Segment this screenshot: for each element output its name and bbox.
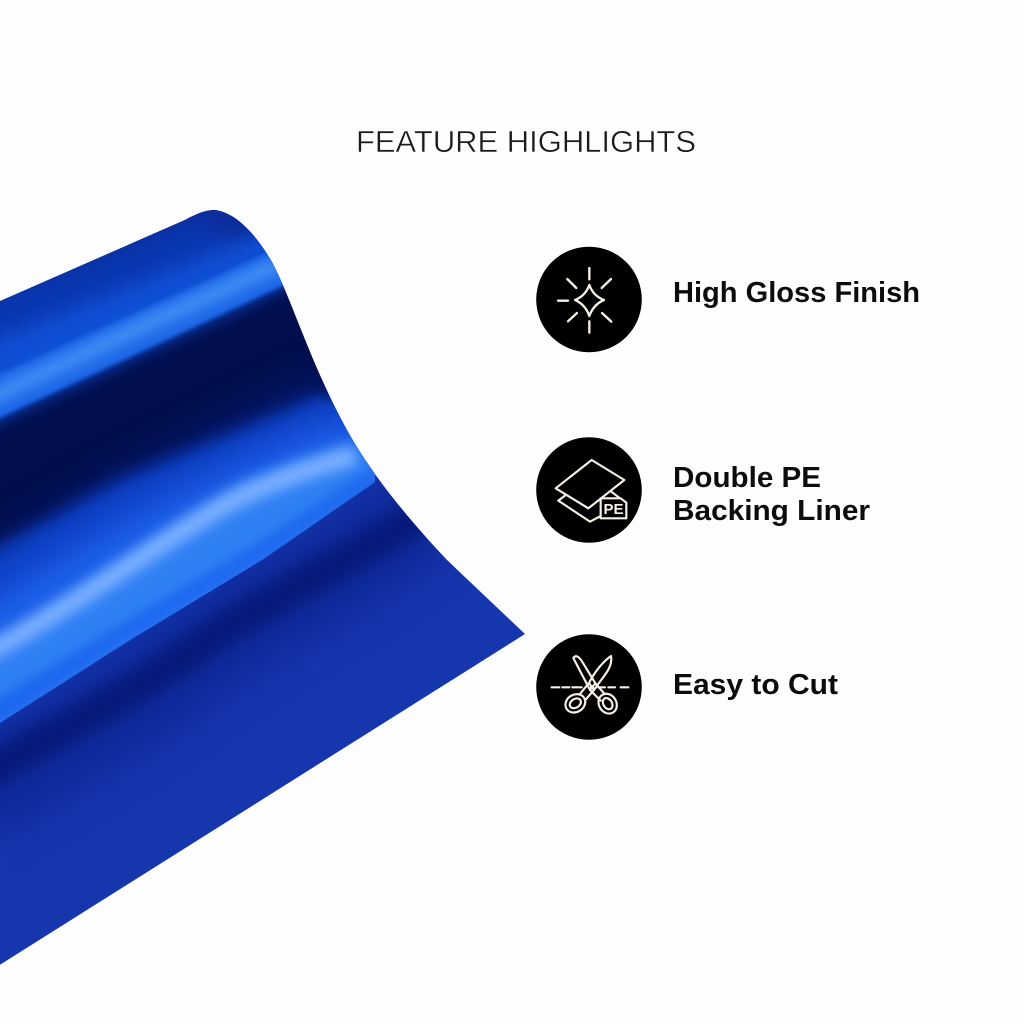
icon: layered sheets with PE tag in black circle [536, 437, 642, 543]
feature: high gloss finish [536, 247, 920, 352]
label: Double PE Backing Liner [673, 462, 870, 527]
icon: layered sheets with PE tag in black circle: PE [603, 501, 624, 518]
feature: easy to cut [536, 634, 838, 740]
icon: scissors on dashed line in black circle [536, 634, 642, 740]
label: Double PE Backing Liner: Backing Liner [673, 495, 870, 527]
heading: FEATURE HIGHLIGHTS [356, 124, 696, 159]
label: Double PE Backing Liner: Double PE [673, 462, 821, 494]
product image: blue vinyl sheet [0, 180, 540, 990]
feature: double PE backing liner [536, 437, 870, 543]
icon: sparkle in black circle [536, 247, 642, 352]
label: Easy to Cut: Easy to Cut [673, 669, 838, 701]
label: High Gloss Finish: High Gloss Finish [673, 277, 920, 309]
